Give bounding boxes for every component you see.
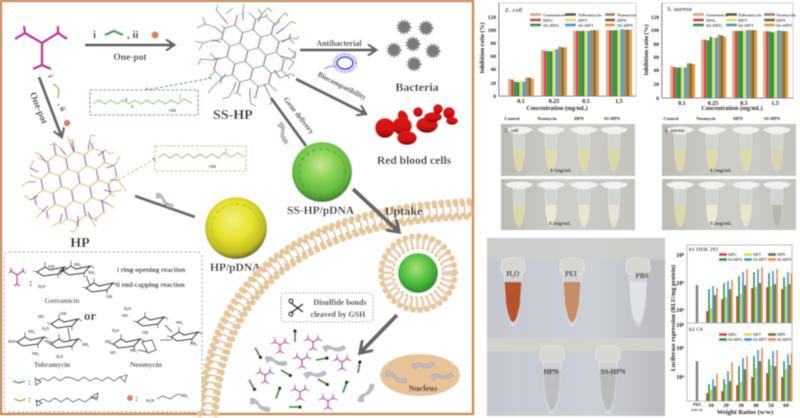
icon: DNA near HP <box>153 192 176 209</box>
photo: E. coli tubes: Neomycin <box>537 116 557 121</box>
callout: SS linker structure: S <box>125 97 128 102</box>
chart: E. coli inhibition <box>479 3 637 112</box>
key: diamine: : <box>135 393 138 403</box>
sphere: SS-HP/pDNA <box>292 142 352 202</box>
callout: disulfide bonds: Disulfide bonds <box>313 298 367 307</box>
callout: SS linker structure <box>90 78 212 115</box>
structure: neomycin: NH₂ <box>176 320 184 325</box>
chart legend: HPG <box>728 332 737 337</box>
chart legend: SS-HPT <box>578 23 594 28</box>
panel frame <box>1 1 473 414</box>
chart legend: Gentamicin <box>706 12 729 18</box>
structure: tobramycin: H₂N <box>42 326 49 331</box>
y axis ticks: 100 <box>651 28 659 34</box>
photo: hemolysis tubes: PBS <box>636 272 649 280</box>
chart: luciferase expression b2 C6: 10⁴ <box>676 375 684 381</box>
chart: luciferase expression b2 C6: PEI <box>693 402 701 407</box>
photo: E. coli tubes: E. coli <box>505 129 519 134</box>
chart: E. coli inhibition: 0.5 <box>582 99 590 105</box>
y axis ticks: 120 <box>651 15 659 21</box>
y axis ticks: 60 <box>654 55 659 61</box>
icon: bacteria cluster <box>388 21 439 70</box>
linker: SS epoxide <box>13 375 127 387</box>
y axis ticks: 20 <box>490 81 496 87</box>
structure: neomycin: NH₂ <box>190 341 198 346</box>
structure: gentamicin: NH₂ <box>88 270 96 275</box>
chart legend: SS-HPG <box>706 23 723 28</box>
structure: tobramycin: OH <box>60 311 67 316</box>
structure: tobramycin: HO <box>8 339 14 344</box>
chart: luciferase expression b2 C6: 10 <box>708 403 714 409</box>
structure: tobramycin: NH₂ <box>82 342 90 347</box>
chart legend: HPT <box>753 332 762 337</box>
photo: hemolysis tubes <box>487 238 665 416</box>
cell membrane <box>200 201 473 414</box>
arrow: antibacterial <box>300 39 374 50</box>
y axis ticks <box>488 15 496 100</box>
key: diamine <box>127 393 189 403</box>
chart legend: HPN <box>777 332 786 337</box>
chart: luciferase expression b2 C6: 10⁶ <box>676 346 684 352</box>
y axis ticks: 100 <box>488 28 496 34</box>
y axis ticks: 0 <box>493 94 496 100</box>
chart: luciferase expression b1 HEK 293: 10⁴ <box>676 308 684 314</box>
label: HP/pDNA: HP/pDNA <box>210 262 261 274</box>
structure: gentamicin: H₂N <box>38 284 45 289</box>
chart legend: SS-HPG <box>543 23 560 28</box>
linker: epoxide <box>14 393 98 406</box>
chart: E. coli inhibition: E. coli <box>504 7 523 14</box>
polymer network: SS-HP <box>195 4 299 106</box>
photo: hemolysis tubes: SS-HPN <box>601 368 625 376</box>
chart legend: Gentamicin <box>543 12 566 18</box>
photo: S. aureus tubes: S. aureus <box>665 129 685 134</box>
chart legend: HPT <box>578 18 587 23</box>
icon: branched core monomer <box>15 26 67 69</box>
callout: SS linker structure: OH <box>169 108 177 113</box>
structure: gentamicin: OH <box>106 294 113 299</box>
linker: SS epoxide: : <box>28 377 31 387</box>
chart legend: Tobramycin <box>578 12 602 18</box>
arrow: one-pot to HP: i <box>46 73 56 80</box>
chart: luciferase expression b2 C6: 10⁸ <box>676 323 684 329</box>
arrow: release <box>362 315 397 351</box>
chart: luciferase expression b1 HEK 293: b1 HEK 293 <box>689 247 718 253</box>
chart legend: SS-HPG <box>728 337 742 342</box>
icon: scissors <box>289 299 303 316</box>
structure: gentamicin <box>33 261 117 299</box>
structure: neomycin: NH₂ <box>130 348 138 353</box>
text: reaction i: i ring-opening reaction <box>117 266 185 274</box>
icon: blue bacterium <box>324 54 356 72</box>
arrow: one-pot to HP: One-pot <box>27 91 49 126</box>
panel: legend of chemical structures <box>4 252 202 412</box>
chart: E. coli inhibition: Inhibition ratio (%) <box>479 22 486 74</box>
chart: E. coli inhibition: 0.25 <box>549 99 559 105</box>
photo: E. coli tubes: SS-HPN <box>604 116 621 121</box>
chart legend: HPG <box>543 18 553 23</box>
icon: core key <box>9 268 25 286</box>
callout: disulfide bonds <box>281 293 373 322</box>
photo: hemolysis tubes: HPN <box>544 368 558 376</box>
photo: S. aureus tubes: Neomycin <box>696 116 716 121</box>
y axis ticks: 60 <box>490 54 496 60</box>
structure: neomycin: H₂N <box>124 306 131 311</box>
chart legend: SS-HPN <box>617 23 634 28</box>
arrow: biocompatibility <box>296 70 368 113</box>
label: Gentamicin: Gentamicin <box>44 297 80 305</box>
arrow: one-pot to SS-HP <box>85 29 172 63</box>
chart: E. coli inhibition: 1.5 <box>615 99 623 105</box>
structure: tobramycin: NH₂ <box>28 329 36 334</box>
photo: hemolysis tubes: H₂O <box>506 270 520 278</box>
chart: S. aureus inhibition: S. aureus <box>667 6 693 13</box>
text: reaction ii: ii end-capping reaction <box>116 281 185 289</box>
chart: luciferase expression b2 C6: Weight Ratios (w/w) <box>717 409 773 416</box>
chart: S. aureus inhibition <box>643 3 796 112</box>
panel: synthesis and gene delivery scheme <box>1 1 473 414</box>
photo: S. aureus tubes: HPN <box>733 116 743 121</box>
chart legend <box>693 12 796 28</box>
callout: HP linker structure <box>118 146 246 180</box>
label: Red blood cells: Red blood cells <box>377 155 452 167</box>
chart: E. coli inhibition: 0.1 <box>517 99 525 105</box>
structure: neomycin: H₂N <box>112 328 119 333</box>
key: diamine: NH₂ <box>180 393 189 398</box>
chart legend: HPN <box>776 18 786 23</box>
chart legend: HPT <box>753 252 762 257</box>
structure: tobramycin: NH₂ <box>32 351 40 356</box>
chart legend: SS-HPT <box>753 337 767 342</box>
chart legend: HPT <box>738 18 747 23</box>
y axis ticks <box>651 15 659 102</box>
structure: neomycin: HO <box>110 350 116 355</box>
nucleus: Nucleus <box>409 383 438 393</box>
chart legend: SS-HPN <box>777 337 791 342</box>
y axis ticks: 20 <box>654 82 659 88</box>
y axis ticks: 120 <box>488 15 496 21</box>
chart legend: SS-HPN <box>777 257 791 262</box>
arrow: one-pot to SS-HP: One-pot <box>113 53 147 63</box>
y axis ticks: 80 <box>654 42 659 48</box>
arrow: one-pot to SS-HP: , ii <box>127 29 139 41</box>
structure: tobramycin <box>8 311 90 359</box>
chart: S. aureus inhibition: Inhibition ratio (%) <box>643 24 650 76</box>
chart legend: HPN <box>617 18 627 23</box>
chart legend: HPN <box>777 252 786 257</box>
chart: luciferase expression b2 C6: b2 C6 <box>689 327 703 333</box>
chart legend: Tobramycin <box>738 12 762 18</box>
callout: HP linker structure: OH <box>209 164 217 169</box>
chart legend <box>719 252 791 262</box>
chart legend: Neomycin <box>617 12 637 18</box>
structure: tobramycin: H₂N <box>56 354 63 359</box>
chart: E. coli inhibition: Concentration (mg/mL) <box>526 105 588 112</box>
label: Uptake: Uptake <box>385 204 423 218</box>
released fragments <box>247 329 375 412</box>
arrow: HP to HP/pDNA <box>135 196 195 217</box>
y axis ticks: 0 <box>656 96 659 102</box>
chart: luciferase expression b2 C6: 40 <box>753 403 759 409</box>
arrow: gene delivery: Gene delivery <box>282 95 316 136</box>
structure: neomycin: OH <box>142 330 149 335</box>
chart: luciferase expression b2 C6: 30 <box>738 403 744 409</box>
icon: DNA near gene delivery <box>274 121 293 145</box>
arrow: antibacterial: Antibacterial <box>316 39 362 48</box>
structure: gentamicin: OH <box>48 264 55 269</box>
callout: disulfide bonds: cleaved by GSH <box>311 310 366 319</box>
structure: neomycin: HO <box>122 313 128 318</box>
vesicle with nanoparticle <box>381 236 455 310</box>
text: or: or <box>84 308 96 323</box>
photo: E. coli tubes: Control <box>505 116 520 121</box>
chart: luciferase expression b1 HEK 293: 10⁸ <box>676 253 684 259</box>
y axis ticks: 40 <box>654 68 659 74</box>
label: Neomycin: Neomycin <box>130 360 163 369</box>
chart legend <box>530 12 637 28</box>
chart legend: SS-HPT <box>738 23 754 28</box>
chart: luciferase expression b2 C6: 20 <box>723 403 729 409</box>
photo: E. coli tubes: HPN <box>574 116 584 121</box>
chart legend: Neomycin <box>776 12 796 18</box>
arrow: gene delivery <box>271 95 316 146</box>
polymer network: HP <box>22 135 126 232</box>
panel: antibacterial charts <box>479 3 796 416</box>
callout: SS linker structure: S <box>131 104 134 109</box>
chart: S. aureus inhibition: 1.5 <box>771 101 779 107</box>
label: SS-HP/pDNA: SS-HP/pDNA <box>287 205 355 217</box>
key: diamine: H₂N <box>146 398 155 403</box>
chart legend: SS-HPN <box>776 23 793 28</box>
icon: red blood cells <box>375 104 458 145</box>
label: Bacteria: Bacteria <box>395 80 439 94</box>
chart: S. aureus inhibition: 0.25 <box>708 101 718 107</box>
chart: luciferase expression b1 HEK 293: 10⁶ <box>676 281 684 287</box>
label: HP: HP <box>70 236 90 251</box>
photo: E. coli tubes <box>501 116 635 230</box>
photo: S. aureus tubes: Control <box>664 116 679 121</box>
sphere: HP/pDNA <box>205 197 267 259</box>
chart: luciferase expression b2 C6: 50 <box>768 403 774 409</box>
chart: luciferase expression b1 HEK 293 <box>676 245 792 323</box>
chart: S. aureus inhibition: 0.5 <box>740 101 748 107</box>
structure: tobramycin: HO <box>38 314 44 319</box>
arrow: one-pot to SS-HP: i <box>93 29 96 41</box>
arrow: biocompatibility: Biocompatibility <box>316 70 368 102</box>
chart: luciferase expression b2 C6: Luciferase expression (RLU/mg protein) <box>670 265 677 371</box>
chart: luciferase expression b2 C6: N/P=10 <box>691 408 703 412</box>
y axis ticks: 40 <box>490 67 496 73</box>
photo: S. aureus tubes <box>662 116 796 230</box>
photo: E. coli tubes: 0.5mg/mL <box>549 222 572 227</box>
arrow: uptake <box>353 189 397 230</box>
arrow: one-pot to HP: , ii <box>56 101 68 113</box>
chart legend: HPG <box>706 18 716 23</box>
photo: S. aureus tubes: 0.5mg/mL <box>710 222 733 227</box>
chart legend: SS-HPT <box>753 257 767 262</box>
chart: S. aureus inhibition: Concentration (mg/mL) <box>701 105 763 112</box>
chart: luciferase expression b2 C6: 60 <box>783 403 789 409</box>
chart legend <box>719 332 791 342</box>
chart legend: HPG <box>728 252 737 257</box>
label: SS-HP: SS-HP <box>213 108 253 123</box>
linker: epoxide: : <box>28 394 31 404</box>
chart legend: SS-HPG <box>728 257 742 262</box>
photo: E. coli tubes: 0.1mg/mL <box>550 169 573 174</box>
structure: neomycin: HO <box>105 339 111 344</box>
structure: neomycin <box>105 306 202 355</box>
y axis ticks: 80 <box>490 41 496 47</box>
photo: S. aureus tubes: 0.1mg/mL <box>710 169 733 174</box>
chart: luciferase expression b2 C6 <box>670 265 792 416</box>
text: colon: : <box>29 278 32 289</box>
arrow: one-pot to HP <box>27 73 70 135</box>
structure: gentamicin: NH₂ <box>74 262 82 267</box>
chart: S. aureus inhibition: 0.1 <box>678 101 686 107</box>
photo: S. aureus tubes: SS-HPN <box>764 116 781 121</box>
label: Tobramycin: Tobramycin <box>34 361 70 369</box>
photo: hemolysis tubes: PEI <box>565 270 577 278</box>
nucleus <box>380 354 460 396</box>
